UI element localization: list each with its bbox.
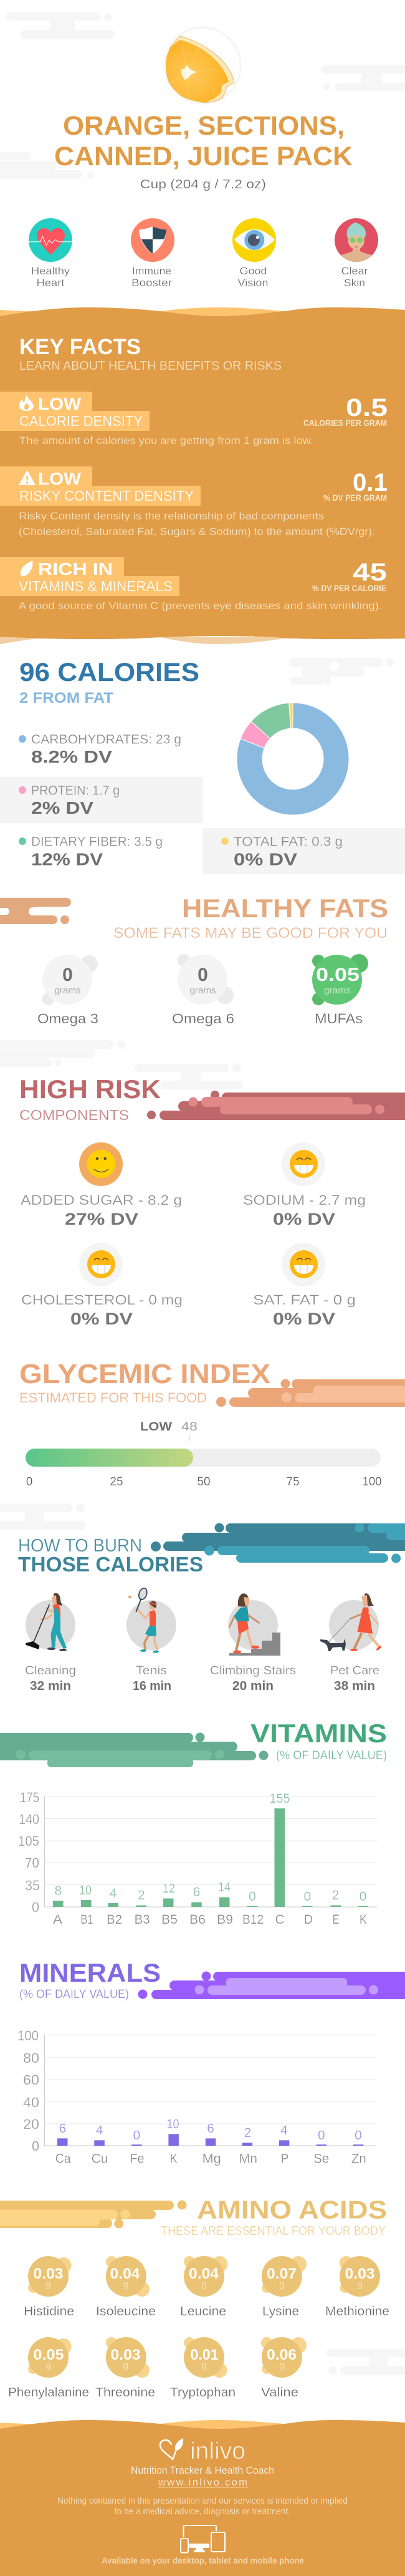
icon: clear skin	[335, 218, 378, 263]
donut chart	[237, 703, 349, 815]
fact: rich in vitamins and minerals: A good source of Vitamin C (prevents eye diseases and skin wrinkling).	[19, 601, 382, 612]
heading: healthy fats: HEALTHY FATS	[182, 894, 388, 923]
bar chart: vitamins: 70	[25, 1855, 39, 1871]
bar chart: vitamins: 0	[32, 1899, 39, 1915]
activity: climbing stairs	[228, 1593, 280, 1656]
legend: dietary fiber: 12% DV	[31, 849, 103, 869]
fact: risky content density: RISKY CONTENT DENSITY	[19, 488, 194, 504]
heading: key facts: KEY FACTS	[19, 335, 141, 359]
heading: high risk	[19, 1074, 161, 1123]
item: cholesterol: CHOLESTEROL - 0 mg	[21, 1292, 183, 1308]
legend: total fat: TOTAL FAT: 0.3 g	[234, 834, 343, 849]
bar chart: vitamins: 2	[332, 1888, 339, 1903]
heading: minerals: (% OF DAILY VALUE)	[19, 1988, 129, 2001]
stat: mufas: 0.05	[316, 965, 360, 985]
heading: calories: 96 CALORIES	[19, 657, 199, 687]
decorative band	[138, 1972, 405, 1999]
bar chart: vitamins: B2	[107, 1913, 122, 1927]
bar chart: minerals: 0	[355, 2128, 362, 2143]
stat: methionine: Methionine	[325, 2305, 389, 2318]
fact: calorie density: The amount of calories you are getting from 1 gram is low.	[19, 435, 313, 446]
fact: calorie density: 0.5	[346, 394, 388, 422]
stat: leucine: Leucine	[180, 2305, 226, 2318]
bar chart: minerals: 0	[318, 2128, 325, 2143]
activity: pet care	[320, 1593, 382, 1651]
label: pet care: 38 min	[334, 1679, 375, 1693]
decorative band	[0, 1732, 268, 1767]
bar chart: minerals: 4	[280, 2123, 288, 2138]
item: added sugar: 27% DV	[65, 1210, 138, 1228]
label: climbing stairs	[210, 1664, 296, 1693]
legend: dietary fiber: DIETARY FIBER: 3.5 g	[31, 834, 163, 849]
bar chart: minerals: 2	[244, 2126, 251, 2140]
bar chart: vitamins: 10	[79, 1883, 92, 1898]
fact: rich in vitamins and minerals: VITAMINS & MINERALS	[19, 578, 173, 594]
heading: glycemic index: ESTIMATED FOR THIS FOOD	[19, 1390, 207, 1406]
stat: tryptophan: Tryptophan	[170, 2386, 236, 2400]
stat: omega 6: Omega 6	[172, 1011, 234, 1026]
title: ORANGE, SECTIONS,	[63, 111, 345, 141]
bar chart: vitamins: B9	[217, 1913, 233, 1927]
panel: footer	[0, 2420, 405, 2576]
stat: histidine: 0.03	[34, 2265, 64, 2282]
bar chart: minerals: Mn	[239, 2151, 257, 2166]
heading: vitamins	[250, 1719, 387, 1762]
heading: vitamins: (% OF DAILY VALUE)	[276, 1749, 387, 1762]
panel: amino acids	[0, 2195, 389, 2400]
bar chart: vitamins: K	[360, 1913, 367, 1927]
decorative band	[151, 1523, 405, 1563]
label: cleaning: 32 min	[30, 1679, 71, 1693]
gauge value: 48	[181, 1421, 198, 1434]
stat: valine: g	[279, 2360, 284, 2371]
bar chart: vitamins: 6	[193, 1885, 200, 1899]
decorative band	[0, 2200, 187, 2229]
decorative band	[216, 1379, 405, 1407]
item: sodium	[243, 1142, 366, 1228]
legend: total fat	[202, 828, 405, 874]
stat: omega 6	[172, 954, 234, 1026]
bar chart: minerals: 0	[32, 2138, 39, 2154]
item: saturated fat: SAT. FAT - 0 g	[253, 1292, 356, 1308]
icon: grin	[79, 1243, 123, 1286]
decorative band	[0, 898, 75, 924]
logo: inlivo	[160, 2438, 245, 2464]
bar chart: vitamins: B6	[189, 1913, 206, 1927]
heading: high risk: HIGH RISK	[19, 1074, 161, 1104]
bar chart: minerals: Se	[313, 2151, 329, 2166]
bar chart: vitamins: B1	[80, 1913, 93, 1927]
stat: valine: Valine	[261, 2386, 298, 2400]
bar chart: vitamins: 0	[249, 1889, 256, 1904]
icon: devices	[181, 2525, 225, 2553]
stat: omega 3: Omega 3	[37, 1011, 98, 1026]
fact: risky content density: Risky Content density is the relationship of bad components	[19, 511, 324, 522]
bar chart: vitamins: 0	[360, 1889, 366, 1904]
stat: phenylalanine	[8, 2337, 89, 2400]
fact: risky content density	[0, 466, 388, 538]
bar chart: vitamins: 175	[20, 1790, 39, 1805]
fact: risky content density: (Cholesterol, Saturated Fat, Sugars & Sodium) to the amount (%DV/gr).	[19, 526, 375, 538]
fact: rich in vitamins and minerals: % DV PER CALORIE	[312, 584, 386, 593]
bar chart: minerals: 4	[96, 2123, 103, 2138]
bar chart: minerals: 80	[23, 2050, 39, 2066]
fact: calorie density: LOW	[38, 394, 81, 413]
bar chart: minerals: 40	[23, 2095, 39, 2110]
stat: lysine: Lysine	[262, 2305, 299, 2318]
label: tennis: Tenis	[136, 1664, 167, 1677]
icon: leaf	[21, 561, 32, 576]
bar chart: minerals: 100	[17, 2028, 39, 2043]
icon: grin	[282, 1243, 325, 1286]
label: pet care: Pet Care	[330, 1664, 379, 1677]
label: tennis	[133, 1664, 171, 1693]
legend: protein	[0, 777, 203, 823]
heading: key facts	[19, 335, 282, 373]
bar chart: vitamins: 2	[138, 1888, 145, 1903]
text: disclaimer: to be a medical advice, diagnosis or treatment.	[115, 2507, 290, 2517]
heading: calories: 2 FROM FAT	[19, 690, 113, 707]
stat: isoleucine: g	[123, 2279, 128, 2290]
heading: calories	[19, 657, 199, 707]
text: disclaimer: Nothing contained in this presentation and our services is intended or implied	[57, 2496, 348, 2506]
label: clear skin: Skin	[344, 277, 365, 289]
panel: high risk components	[19, 1074, 405, 1328]
activity: tennis	[126, 1587, 176, 1653]
label: pet care	[330, 1664, 379, 1693]
heading: high risk: COMPONENTS	[19, 1107, 129, 1123]
heading: key facts: LEARN ABOUT HEALTH BENEFITS OR RISKS	[19, 359, 282, 373]
bar chart: vitamins: 35	[25, 1878, 40, 1893]
stat: lysine	[262, 2256, 307, 2318]
bar chart: minerals: 0	[133, 2128, 140, 2143]
stat: mufas	[312, 954, 368, 1026]
heading: how to burn	[18, 1536, 203, 1576]
panel: healthy fats	[0, 894, 388, 1026]
stat: valine: 0.06	[267, 2347, 297, 2363]
label: good vision: Good	[239, 265, 267, 277]
item: sodium: 0% DV	[273, 1210, 335, 1228]
gauge value	[140, 1421, 198, 1441]
link: website: www.inlivo.com	[158, 2477, 247, 2488]
icon: warning	[19, 470, 36, 485]
heading: amino acids: AMINO ACIDS	[197, 2195, 387, 2224]
icon: immune booster	[131, 218, 174, 262]
heading: glycemic index	[19, 1359, 270, 1406]
label: cleaning: Cleaning	[25, 1664, 76, 1677]
heading: vitamins: VITAMINS	[250, 1719, 387, 1748]
logo: inlivo: inlivo	[190, 2438, 245, 2464]
bar chart: minerals: 6	[59, 2121, 66, 2136]
bar chart: minerals: Cu	[92, 2151, 108, 2166]
stat: valine	[261, 2337, 307, 2400]
item: saturated fat	[253, 1243, 356, 1328]
activity: cleaning	[26, 1593, 75, 1651]
label: good vision	[238, 265, 268, 289]
legend: protein: 2% DV	[31, 798, 93, 818]
heading: glycemic index: GLYCEMIC INDEX	[19, 1359, 270, 1389]
label: good vision: Vision	[238, 277, 268, 289]
bar chart: vitamins: B3	[135, 1913, 150, 1927]
stat: omega 3: grams	[55, 985, 81, 996]
heading: minerals	[19, 1958, 161, 2001]
bar chart: vitamins: 0	[304, 1889, 311, 1904]
stat: threonine: 0.03	[111, 2347, 141, 2363]
stat: threonine: g	[123, 2360, 128, 2371]
text: availability: Available on your desktop, tablet and mobile phone	[102, 2555, 304, 2565]
stat: leucine: g	[201, 2279, 207, 2290]
stat: isoleucine: 0.04	[110, 2265, 140, 2282]
stat: tryptophan: g	[201, 2360, 207, 2371]
label: climbing stairs: 20 min	[232, 1679, 274, 1693]
fact: calorie density	[0, 392, 388, 446]
bar chart: minerals: 10	[167, 2117, 179, 2131]
bar chart: minerals: Fe	[130, 2151, 145, 2166]
legend: carbohydrates: 8.2% DV	[31, 747, 112, 766]
bar chart: minerals: P	[281, 2151, 288, 2166]
gauge scale: 0	[26, 1475, 32, 1488]
stat: histidine: Histidine	[24, 2305, 74, 2318]
bar chart: vitamins	[18, 1790, 377, 1927]
label: cleaning	[25, 1664, 76, 1693]
fact: calorie density: CALORIES PER GRAM	[303, 418, 387, 428]
bar chart: vitamins: A	[53, 1913, 62, 1927]
icon: grin	[282, 1142, 325, 1186]
bar chart: vitamins: D	[304, 1913, 313, 1927]
bar chart: minerals: 60	[23, 2072, 39, 2088]
gauge scale: 50	[197, 1475, 211, 1488]
text: tagline: Nutrition Tracker & Health Coach	[131, 2465, 274, 2476]
bar chart: vitamins: C	[275, 1913, 284, 1927]
bar chart: vitamins: 105	[18, 1833, 39, 1849]
stat: tryptophan: 0.01	[191, 2347, 218, 2363]
heading: healthy fats	[113, 894, 388, 942]
bar chart: vitamins: B5	[161, 1913, 178, 1927]
gauge scale: 100	[363, 1475, 381, 1488]
bar chart: vitamins: 4	[110, 1886, 117, 1901]
fact: risky content density: LOW	[38, 469, 81, 488]
stat: lysine: 0.07	[267, 2265, 297, 2282]
label: clear skin	[341, 265, 368, 289]
icon: smiley	[79, 1142, 123, 1186]
label: healthy heart: Healthy	[31, 265, 70, 277]
item: saturated fat: 0% DV	[273, 1310, 335, 1328]
bar chart: minerals: 6	[207, 2121, 214, 2136]
stat: omega 6: 0	[198, 965, 208, 985]
stat: phenylalanine: g	[45, 2360, 51, 2371]
bar chart: minerals	[17, 2028, 377, 2166]
stat: histidine: g	[45, 2279, 51, 2290]
bar chart: vitamins: 8	[54, 1884, 62, 1898]
item: added sugar	[21, 1142, 182, 1228]
gauge bar	[26, 1449, 381, 1467]
label: healthy heart: Heart	[36, 277, 65, 289]
legend: dietary fiber	[19, 834, 163, 869]
stat: mufas: MUFAs	[315, 1011, 363, 1026]
bar chart: minerals: Ca	[55, 2151, 71, 2166]
stat: isoleucine: Isoleucine	[96, 2305, 156, 2318]
stat: methionine: 0.03	[345, 2265, 375, 2282]
panel: minerals	[17, 1958, 405, 2166]
label: immune booster	[131, 265, 172, 289]
fact: risky content density: % DV PER GRAM	[323, 493, 387, 503]
heading: amino acids	[161, 2195, 387, 2238]
gauge scale	[26, 1475, 381, 1488]
panel: vitamins	[0, 1719, 387, 1927]
panel: how to burn those calories	[18, 1523, 405, 1693]
legend: total fat: 0% DV	[234, 849, 297, 869]
label: immune booster: Booster	[131, 277, 172, 289]
bar chart: vitamins: B12	[242, 1913, 264, 1927]
label: tennis: 16 min	[133, 1679, 171, 1693]
heading: how to burn: THOSE CALORIES	[18, 1553, 203, 1576]
heading: how to burn: HOW TO BURN	[18, 1536, 142, 1556]
text: disclaimer	[57, 2496, 348, 2517]
stat: methionine: g	[357, 2279, 363, 2290]
fact: risky content density: 0.1	[353, 469, 388, 496]
icon: flame	[19, 395, 34, 411]
header	[29, 27, 378, 289]
bar chart: vitamins: E	[333, 1913, 340, 1927]
item: sodium: SODIUM - 2.7 mg	[243, 1192, 366, 1208]
heading: amino acids: THESE ARE ESSENTIAL FOR YOUR BODY	[161, 2224, 386, 2238]
bar chart: minerals: 20	[23, 2116, 39, 2132]
stat: leucine: 0.04	[189, 2265, 219, 2282]
fact: calorie density: CALORIE DENSITY	[19, 413, 143, 429]
stat: omega 3	[37, 955, 98, 1026]
item: cholesterol	[21, 1243, 183, 1328]
bar chart: vitamins: 12	[163, 1881, 175, 1896]
heading: healthy fats: SOME FATS MAY BE GOOD FOR YOU	[113, 925, 388, 942]
icon: good vision	[232, 218, 276, 262]
stat: omega 3: 0	[62, 965, 73, 985]
legend: protein: PROTEIN: 1.7 g	[31, 783, 120, 798]
stat: mufas: grams	[324, 985, 351, 996]
panel: key facts	[0, 307, 405, 639]
fact: rich in vitamins and minerals	[0, 557, 387, 612]
bar chart: minerals: Zn	[351, 2151, 366, 2166]
serving size: Cup (204 g / 7.2 oz)	[140, 177, 266, 191]
icon: healthy heart	[29, 218, 72, 262]
stat: histidine	[24, 2256, 74, 2318]
stat: threonine: Threonine	[95, 2386, 155, 2400]
label: healthy heart	[31, 265, 70, 289]
stat: tryptophan	[170, 2337, 236, 2400]
decorative band	[147, 1091, 405, 1120]
icon: orange slice	[164, 27, 241, 104]
legend: carbohydrates	[19, 732, 181, 766]
stat: omega 6: grams	[189, 985, 216, 996]
panel: glycemic index	[19, 1359, 405, 1488]
fact: rich in vitamins and minerals: RICH IN	[38, 559, 113, 579]
bar chart: vitamins: 155	[269, 1792, 290, 1806]
stat: methionine	[325, 2256, 389, 2318]
panel: calories	[0, 657, 405, 874]
stat: phenylalanine: Phenylalanine	[8, 2386, 89, 2400]
legend: carbohydrates: CARBOHYDRATES: 23 g	[31, 732, 181, 747]
label: clear skin: Clear	[341, 265, 368, 277]
title: CANNED, JUICE PACK	[54, 142, 353, 171]
gauge value: LOW	[140, 1421, 172, 1434]
gauge scale: 25	[110, 1475, 123, 1488]
stat: lysine: g	[279, 2279, 284, 2290]
item: cholesterol: 0% DV	[70, 1310, 133, 1328]
title	[54, 111, 353, 171]
stat: isoleucine	[96, 2256, 156, 2318]
label: immune booster: Immune	[132, 265, 171, 277]
bar chart: vitamins: 140	[19, 1811, 39, 1827]
label: climbing stairs: Climbing Stairs	[210, 1664, 296, 1677]
gauge scale: 75	[286, 1475, 300, 1488]
stat: leucine	[180, 2256, 227, 2318]
stat: threonine	[95, 2337, 155, 2400]
heading: minerals: MINERALS	[19, 1958, 161, 1987]
fact: rich in vitamins and minerals: 45	[353, 559, 387, 586]
item: added sugar: ADDED SUGAR - 8.2 g	[21, 1192, 182, 1208]
bar chart: minerals: Mg	[202, 2151, 221, 2166]
stat: phenylalanine: 0.05	[34, 2347, 64, 2363]
bar chart: minerals: K	[170, 2151, 178, 2166]
bar chart: vitamins: 14	[218, 1880, 231, 1894]
